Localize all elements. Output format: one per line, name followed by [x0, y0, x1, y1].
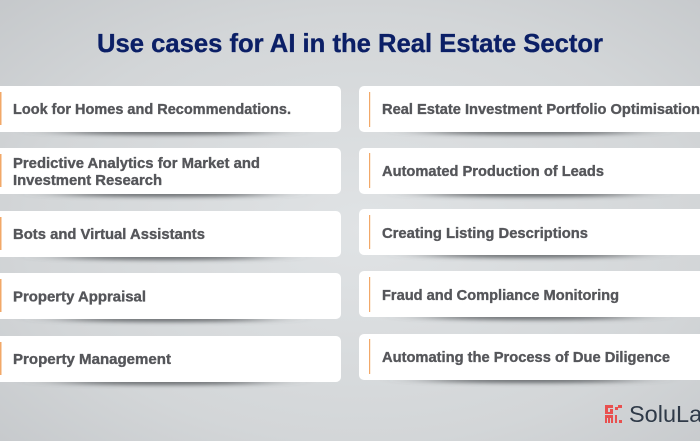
card: portfolio optimisation: Real Estate Investment Portfolio Optimisation	[382, 102, 700, 118]
card: creating listing descriptions: Creating Listing Descriptions	[382, 226, 588, 242]
panel: left column of use cases	[0, 86, 341, 385]
card: creating listing descriptions	[359, 209, 700, 258]
title: Use cases for AI in the Real Estate Sector	[97, 28, 603, 58]
panel: right column of use cases	[359, 86, 700, 383]
icon: logo mark	[605, 405, 622, 423]
card: fraud and compliance monitoring	[359, 271, 700, 320]
card: property appraisal: Property Appraisal	[13, 290, 146, 306]
card: property management	[0, 336, 341, 385]
card: automated production of leads	[359, 148, 700, 197]
logo: SoluLab	[605, 401, 700, 427]
card: portfolio optimisation	[359, 86, 700, 135]
card: homes and recommendations: Look for Homes and Recommendations.	[13, 102, 291, 118]
card: due diligence automation: Automating the Process of Due Diligence	[382, 350, 670, 366]
card: bots and virtual assistants	[0, 211, 341, 260]
card: due diligence automation	[359, 334, 700, 383]
card: fraud and compliance monitoring: Fraud and Compliance Monitoring	[382, 288, 619, 304]
card: property management: Property Management	[13, 352, 171, 368]
card: property appraisal	[0, 273, 341, 322]
card: predictive analytics	[0, 148, 341, 197]
card: homes and recommendations	[0, 86, 341, 135]
card: automated production of leads: Automated Production of Leads	[382, 164, 604, 180]
card: predictive analytics: Predictive Analytics for Market and	[13, 156, 260, 172]
card: predictive analytics: Investment Research	[13, 173, 162, 189]
card: bots and virtual assistants: Bots and Virtual Assistants	[13, 227, 205, 243]
